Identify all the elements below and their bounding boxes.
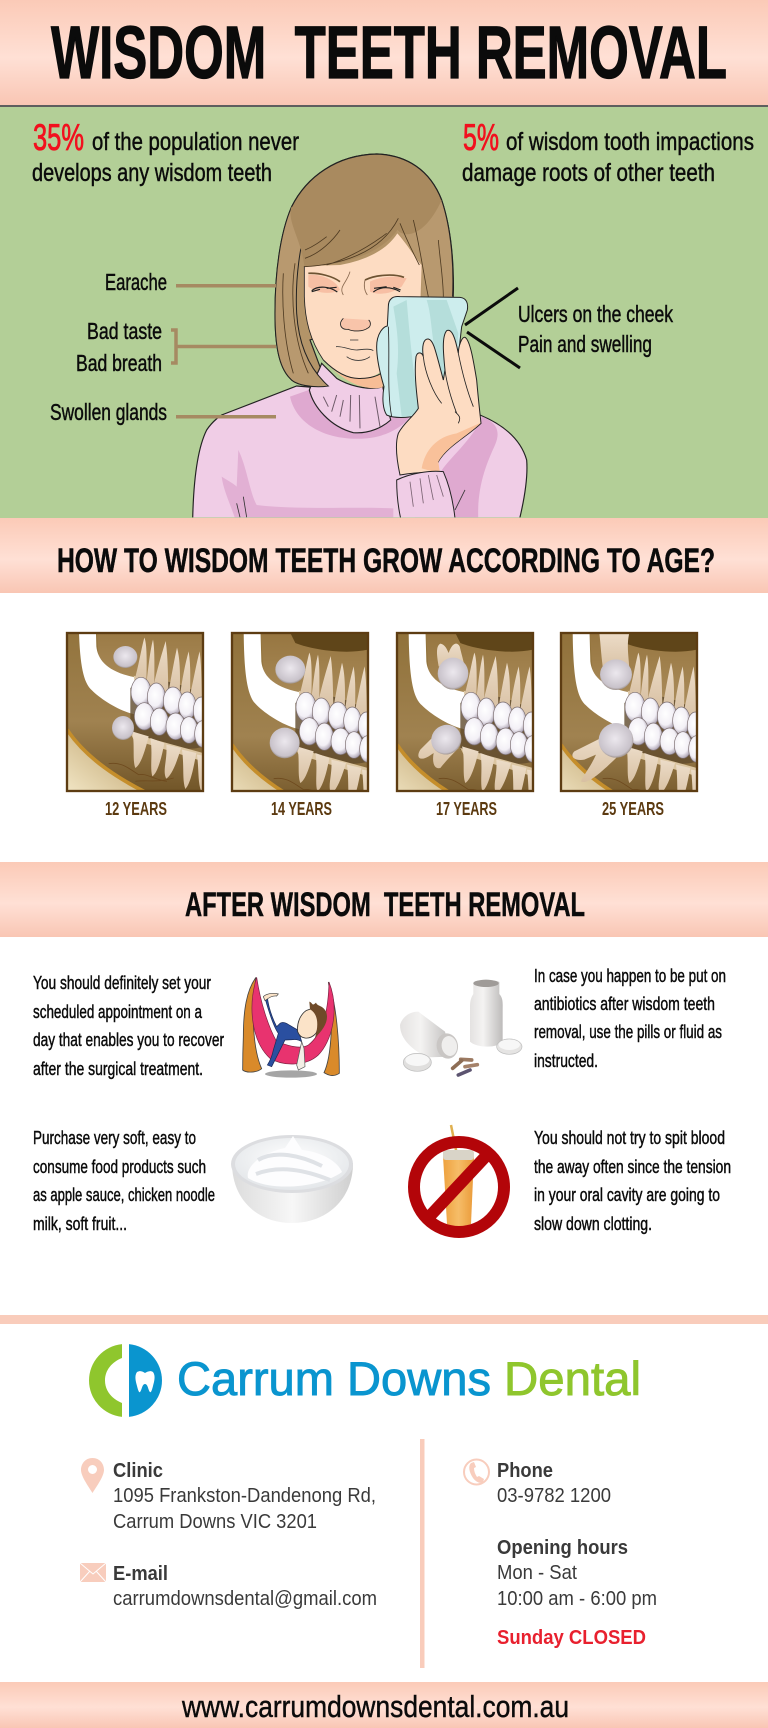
text block: soft food advice: consume food products such [33, 1157, 206, 1177]
side hair [275, 207, 328, 387]
contact: email: carrumdownsdental@gmail.com [113, 1588, 377, 1610]
text block: antibiotics advice: antibiotics after wisdom teeth [534, 994, 715, 1014]
text block: spitting advice: slow down clotting. [534, 1214, 652, 1234]
heading band: after removal [0, 862, 768, 937]
footer band with website [0, 1682, 768, 1728]
callout: cheek symptoms: Pain and swelling [518, 331, 652, 357]
turtleneck [309, 363, 391, 433]
tile: 17 years: 17 YEARS [436, 799, 497, 819]
eyes [312, 287, 401, 292]
callout: cheek symptoms: Ulcers on the cheek [518, 301, 673, 327]
icon: bowl of cream [231, 1135, 353, 1223]
logo mark [89, 1344, 162, 1417]
panel: symptoms illustration [0, 107, 768, 520]
contact: phone: 03-9782 1200 [497, 1485, 611, 1507]
contact: opening hours: Sunday CLOSED [497, 1627, 646, 1649]
footer band with website: www.carrumdownsdental.com.au [181, 1689, 569, 1724]
logo: Carrum Downs Dental: Carrum Downs [177, 1352, 491, 1405]
tile: 17 years [397, 625, 541, 819]
illustration: woman with toothache [193, 154, 527, 520]
wisdom teeth at 17 [418, 644, 465, 768]
text block: rest advice: after the surgical treatment. [33, 1059, 203, 1079]
tile: 12 years: 12 YEARS [105, 799, 167, 819]
contact: opening hours [497, 1537, 657, 1649]
stat: 5 percent: damage roots of other teeth [462, 159, 715, 187]
label: Bad taste and bad breath [76, 318, 276, 376]
hand [396, 330, 481, 475]
label: Earache [105, 269, 276, 295]
stat: 35 percent: 35% [33, 117, 84, 158]
stat: 5 percent [462, 117, 754, 187]
label: Bad taste and bad breath: Bad taste [87, 318, 162, 344]
contact: phone [464, 1460, 611, 1507]
sweater [193, 386, 527, 520]
label: Earache: Earache [105, 269, 167, 295]
cuff [397, 471, 455, 518]
contact: clinic: Carrum Downs VIC 3201 [113, 1511, 317, 1533]
icon: map pin [81, 1458, 104, 1493]
contact: clinic: 1095 Frankston-Dandenong Rd, [113, 1485, 376, 1507]
blush and brows [308, 275, 407, 294]
tile: 14 years: 14 YEARS [271, 799, 332, 819]
contact: opening hours: 10:00 am - 6:00 pm [497, 1588, 657, 1610]
icon: pill bottles [400, 980, 522, 1075]
logo: Carrum Downs Dental [89, 1344, 641, 1417]
tooth growth stages [66, 632, 698, 815]
icon: envelope [80, 1563, 106, 1582]
text block: soft food advice [33, 1128, 215, 1234]
stat: 5 percent: 5% [463, 117, 499, 158]
towel [377, 297, 468, 417]
header band with title [0, 0, 768, 107]
text block: spitting advice [534, 1128, 731, 1234]
icon: man in hammock [243, 977, 339, 1078]
text block: rest advice: scheduled appointment on a [33, 1002, 203, 1022]
tile: 12 years [66, 632, 204, 815]
label: Swollen glands [50, 399, 276, 425]
text block: soft food advice: Purchase very soft, easy to [33, 1128, 196, 1148]
text block: rest advice: You should definitely set your [33, 973, 211, 993]
label: Bad taste and bad breath: Bad breath [76, 350, 162, 376]
text block: antibiotics advice: instructed. [534, 1051, 598, 1071]
callout: cheek symptoms [465, 288, 673, 368]
hair back [275, 154, 453, 387]
contact: email [80, 1563, 377, 1610]
vertical divider [420, 1439, 424, 1668]
tile: 25 years: 25 YEARS [602, 799, 664, 819]
face [304, 233, 422, 378]
contact: phone: Phone [497, 1460, 553, 1482]
label: Swollen glands: Swollen glands [50, 399, 167, 425]
logo: Carrum Downs Dental: Dental [504, 1352, 641, 1405]
text block: rest advice: day that enables you to recover [33, 1030, 224, 1050]
tile: 25 years [561, 625, 705, 819]
text block: spitting advice: in your oral cavity are going to [534, 1185, 720, 1205]
contact: opening hours: Mon - Sat [497, 1562, 577, 1584]
tile: 14 years [232, 625, 376, 819]
text block: rest advice [33, 973, 224, 1079]
wisdom teeth at 25 [572, 633, 629, 782]
icon: phone [464, 1460, 489, 1484]
contact: clinic [81, 1458, 376, 1533]
text block: soft food advice: milk, soft fruit... [33, 1214, 127, 1234]
contact: opening hours: Opening hours [497, 1537, 628, 1559]
contact: email: E-mail [113, 1563, 168, 1585]
text block: soft food advice: as apple sauce, chicken noodle [33, 1185, 215, 1205]
icon: no drinking sign [414, 1125, 504, 1232]
divider band [0, 1315, 768, 1324]
heading band: after removal: AFTER WISDOM TEETH REMOVAL [185, 886, 585, 924]
wisdom teeth at 12 [112, 646, 137, 740]
wisdom teeth at 14 [270, 656, 305, 758]
heading band: how teeth grow [0, 518, 768, 593]
contact: clinic: Clinic [113, 1460, 163, 1482]
nose and mouth [341, 318, 370, 331]
stat: 35 percent [32, 117, 299, 187]
stat: 35 percent: develops any wisdom teeth [32, 159, 272, 187]
stat: 35 percent: of the population never [92, 128, 299, 156]
text block: antibiotics advice [534, 966, 726, 1071]
